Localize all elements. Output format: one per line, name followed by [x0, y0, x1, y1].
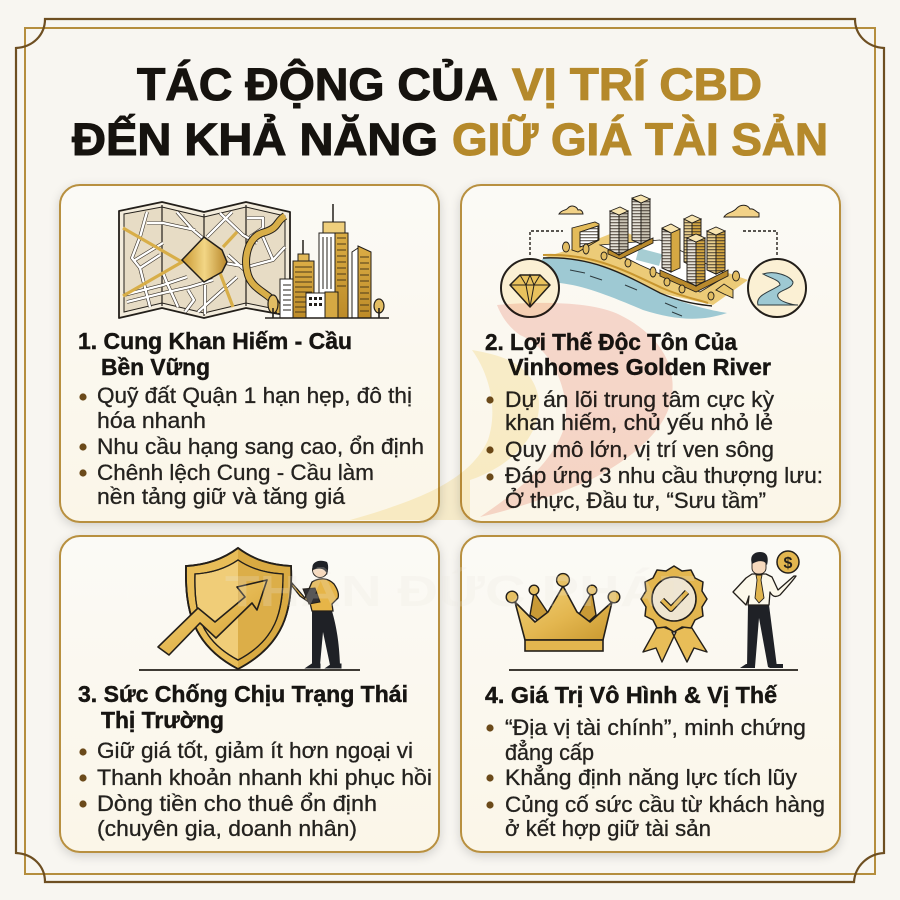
card 1 bullet list: [79, 383, 424, 509]
icon: city map and skyline: [119, 202, 389, 318]
panel: card 3: [60, 536, 439, 852]
card 3 bullet list: Thanh khoản nhanh khi phục hồi: [97, 765, 432, 790]
icon: crown, rosette and businessman: $: [784, 555, 793, 572]
title: TÁC ĐỘNG CỦA: [137, 59, 498, 110]
card 4 bullet list: [486, 715, 825, 841]
card 1 heading: 1. Cung Khan Hiếm - Cầu: [78, 328, 352, 354]
title: [72, 59, 828, 165]
card 2 heading: 2. Lợi Thế Độc Tôn Của: [485, 329, 737, 355]
card 2 bullet list: Dự án lõi trung tâm cực kỳ: [505, 387, 774, 412]
card 2 bullet list: Đáp ứng 3 nhu cầu thượng lưu:: [505, 463, 823, 488]
card 1 bullet list: Quỹ đất Quận 1 hạn hẹp, đô thị: [97, 383, 412, 408]
panel: card 2: [461, 185, 840, 522]
icon: crown, rosette and businessman: [506, 551, 799, 670]
card 2 heading: Vinhomes Golden River: [508, 354, 771, 380]
title: VỊ TRÍ CBD: [512, 59, 762, 110]
card 4 bullet list: ở kết hợp giữ tài sản: [505, 816, 711, 841]
card 4 heading: 4. Giá Trị Vô Hình & Vị Thế: [485, 682, 777, 708]
card 1 bullet list: Nhu cầu hạng sang cao, ổn định: [97, 434, 424, 459]
card 2 bullet list: Quy mô lớn, vị trí ven sông: [505, 437, 774, 462]
card 3 heading: 3. Sức Chống Chịu Trạng Thái: [78, 681, 408, 707]
card 4 bullet list: Củng cố sức cầu từ khách hàng: [505, 792, 825, 817]
card 1 bullet list: Chênh lệch Cung - Cầu làm: [97, 460, 374, 485]
title: ĐẾN KHẢ NĂNG: [72, 114, 438, 165]
card 3 bullet list: [79, 738, 432, 841]
card 2 bullet list: khan hiếm, chủ yếu nhỏ lẻ: [505, 410, 773, 435]
panel: card 1: [60, 185, 439, 522]
card 4 bullet list: “Địa vị tài chính”, minh chứng: [505, 715, 806, 740]
card 1 bullet list: hóa nhanh: [97, 408, 206, 433]
card 3 bullet list: (chuyên gia, doanh nhân): [97, 816, 357, 841]
panel: card 4: [461, 536, 840, 852]
card 2 bullet list: [486, 387, 823, 513]
card 2 heading: [485, 329, 771, 380]
card 2 bullet list: Ở thực, Đầu tư, “Sưu tầm”: [505, 488, 766, 513]
card 3 bullet list: Dòng tiền cho thuê ổn định: [97, 791, 377, 816]
card 1 heading: Bền Vững: [101, 354, 210, 380]
card 4 bullet list: đẳng cấp: [505, 740, 594, 765]
card 4 bullet list: Khẳng định năng lực tích lũy: [505, 765, 797, 790]
watermark logo: [350, 303, 673, 520]
card 1 heading: [78, 328, 352, 380]
card 3 heading: Thị Trường: [101, 707, 224, 733]
card 3 bullet list: Giữ giá tốt, giảm ít hơn ngoại vi: [97, 738, 413, 763]
card 3 heading: [78, 681, 408, 733]
title: GIỮ GIÁ TÀI SẢN: [452, 114, 828, 165]
card 1 bullet list: nền tảng giữ và tăng giá: [97, 484, 346, 509]
icon: riverside development: [501, 195, 806, 319]
icon: shield with rising arrow and person: [139, 548, 360, 670]
watermark text: THÂN ĐỨC PHÁT: [225, 566, 695, 616]
